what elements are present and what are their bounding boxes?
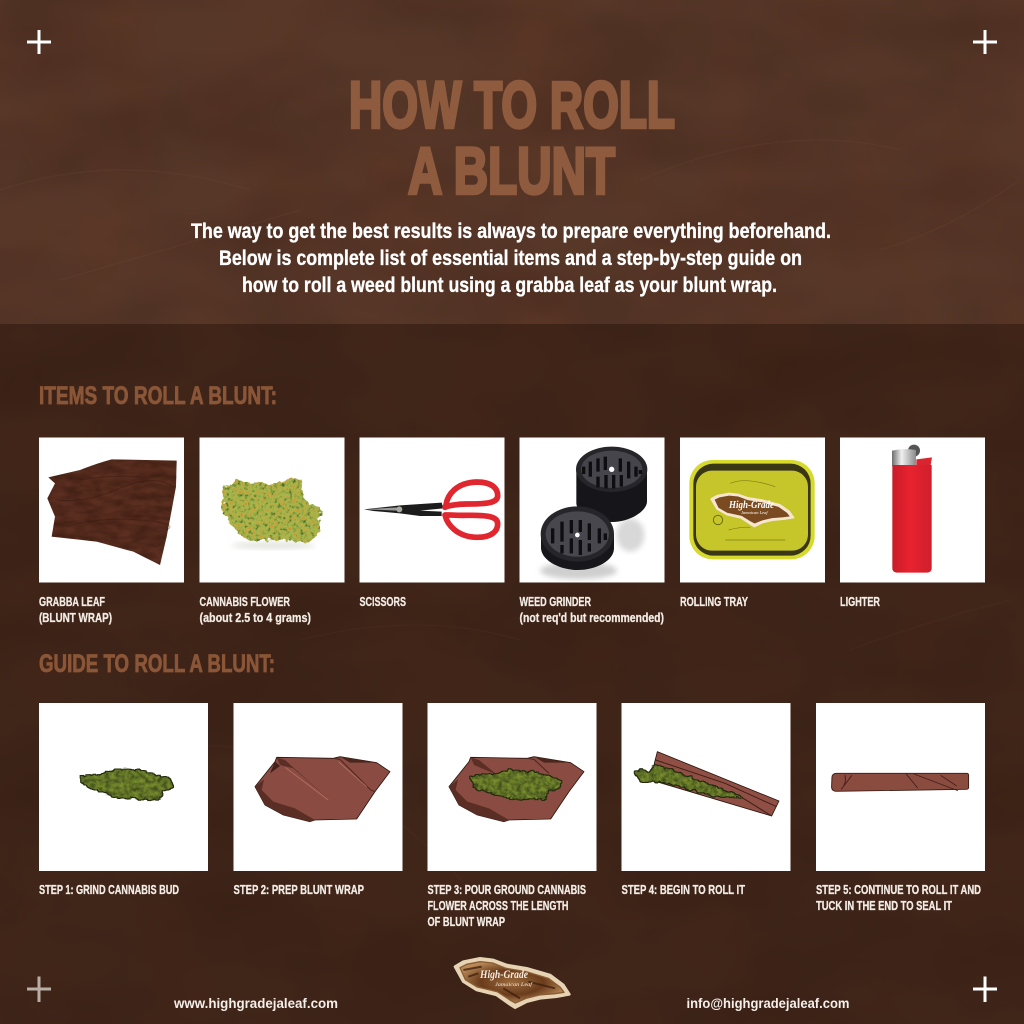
intro paragraph: Below is complete list of essential items and a step-by-step guide on bbox=[219, 246, 802, 270]
item card: grabba leaf bbox=[39, 438, 184, 582]
heading: items: ITEMS TO ROLL A BLUNT: bbox=[39, 382, 277, 410]
step card 2: blunt wrap bbox=[234, 703, 402, 871]
corner mark: top right bbox=[973, 30, 997, 54]
item card: rolling tray: Jamaican Leaf bbox=[741, 510, 768, 515]
footer email: info@highgradejaleaf.com bbox=[686, 996, 850, 1011]
item caption: grabba leaf: (BLUNT WRAP) bbox=[39, 611, 112, 625]
item card: rolling tray bbox=[680, 438, 825, 582]
item caption: cannabis flower bbox=[200, 595, 311, 625]
step card 3: cannabis on wrap bbox=[428, 703, 596, 871]
footer logo bbox=[455, 958, 569, 1008]
intro paragraph: how to roll a weed blunt using a grabba leaf as your blunt wrap. bbox=[242, 273, 777, 297]
item caption: weed grinder: (not req'd but recommended) bbox=[520, 611, 664, 625]
item caption: lighter: LIGHTER bbox=[840, 595, 880, 609]
heading: guide: GUIDE TO ROLL A BLUNT: bbox=[39, 650, 275, 678]
corner mark: top left bbox=[27, 30, 51, 54]
footer logo: Jamaican Leaf bbox=[495, 981, 534, 988]
item card: cannabis flower bbox=[200, 438, 344, 582]
item card: scissors bbox=[360, 438, 504, 582]
step card 4: begin rolling bbox=[622, 703, 790, 871]
item caption: grabba leaf bbox=[39, 595, 112, 625]
corner mark: bottom right bbox=[973, 976, 997, 1002]
step caption 3: OF BLUNT WRAP bbox=[428, 915, 505, 929]
item caption: weed grinder: WEED GRINDER bbox=[520, 595, 591, 609]
corner mark: bottom left bbox=[27, 976, 51, 1002]
item caption: scissors: SCISSORS bbox=[360, 595, 406, 609]
step caption 2: STEP 2: PREP BLUNT WRAP bbox=[234, 883, 364, 897]
intro paragraph: The way to get the best results is always to prepare everything beforehand. bbox=[191, 219, 831, 243]
item caption: cannabis flower: (about 2.5 to 4 grams) bbox=[200, 611, 311, 625]
footer website: www.highgradejaleaf.com bbox=[173, 996, 338, 1011]
item caption: rolling tray: ROLLING TRAY bbox=[680, 595, 748, 609]
step caption 5: TUCK IN THE END TO SEAL IT bbox=[816, 899, 952, 913]
step caption 4: STEP 4: BEGIN TO ROLL IT bbox=[622, 883, 745, 897]
step caption 1: STEP 1: GRIND CANNABIS BUD bbox=[39, 883, 179, 897]
title bbox=[349, 68, 675, 208]
intro paragraph bbox=[191, 219, 831, 297]
item caption: weed grinder bbox=[520, 595, 664, 625]
item card: weed grinder bbox=[520, 438, 664, 582]
step caption 5 bbox=[816, 883, 981, 913]
title: HOW TO ROLL bbox=[349, 68, 675, 142]
item caption: cannabis flower: CANNABIS FLOWER bbox=[200, 595, 290, 609]
item card: rolling tray: High-Grade bbox=[728, 499, 774, 511]
step card 5: finished blunt bbox=[816, 703, 985, 871]
step caption 3: FLOWER ACROSS THE LENGTH bbox=[428, 899, 568, 913]
footer logo: High-Grade bbox=[479, 967, 529, 981]
background: darker lower band bbox=[0, 324, 1024, 1024]
item card: lighter bbox=[840, 438, 985, 582]
step caption 3: STEP 3: POUR GROUND CANNABIS bbox=[428, 883, 586, 897]
item caption: grabba leaf: GRABBA LEAF bbox=[39, 595, 105, 609]
step caption 3 bbox=[428, 883, 586, 929]
title: A BLUNT bbox=[408, 134, 615, 208]
step card 1: ground bud bbox=[39, 703, 208, 871]
